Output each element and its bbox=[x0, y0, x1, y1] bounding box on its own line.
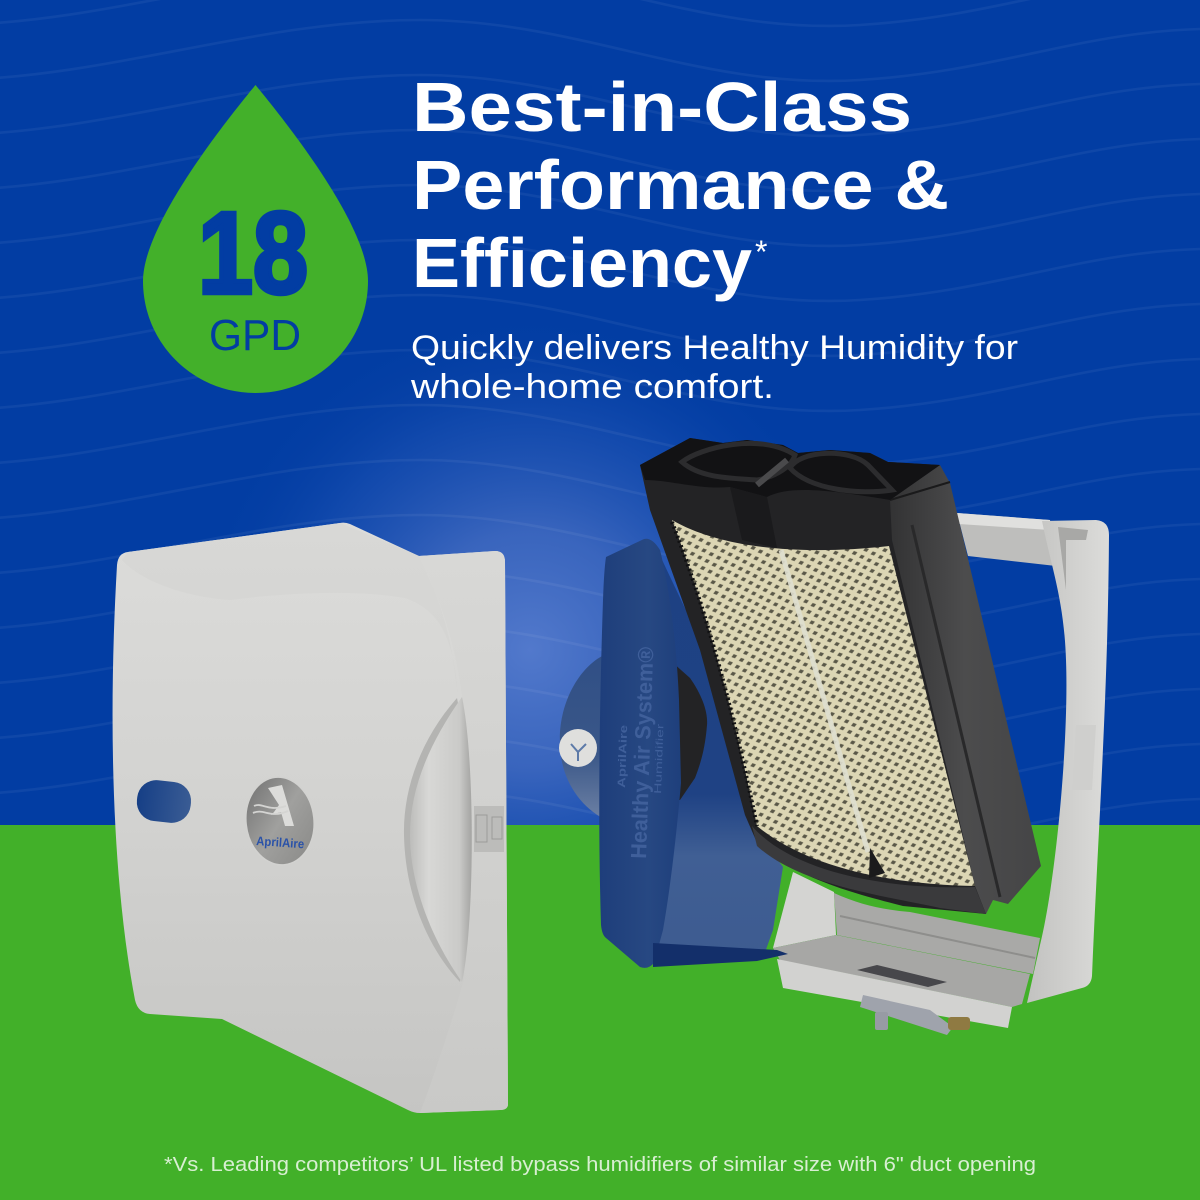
bottom clip bbox=[869, 848, 885, 878]
AprilAire logo badge bbox=[242, 774, 318, 868]
tray front bbox=[777, 959, 1012, 1028]
title: * bbox=[755, 234, 767, 270]
icon: water drop bbox=[143, 85, 368, 393]
blue door panel bbox=[599, 539, 681, 968]
mesh centre seam bbox=[781, 550, 868, 852]
cartridge side wall bbox=[888, 465, 1041, 914]
cover body bbox=[113, 523, 508, 1113]
blue inner duct bbox=[655, 545, 783, 960]
tray floor bbox=[773, 935, 1030, 1007]
unit GPD: GPD bbox=[209, 311, 301, 360]
blue humidity window bbox=[135, 778, 193, 825]
frame post bbox=[1027, 520, 1109, 1003]
cover back disc bbox=[494, 745, 503, 925]
latch recess bbox=[404, 698, 468, 982]
door lettering: AprilAire bbox=[616, 725, 630, 788]
green floor band bbox=[0, 825, 1200, 1200]
title: Efficiency bbox=[412, 224, 752, 302]
cover upper bevel bbox=[122, 523, 458, 700]
tray slot bbox=[857, 965, 947, 987]
mesh edge teeth bbox=[672, 522, 757, 826]
background glow bbox=[100, 300, 960, 826]
frame top arm bbox=[957, 513, 1056, 566]
post clip bbox=[1072, 725, 1096, 790]
cover right wing bbox=[419, 551, 508, 1113]
tray back wall bbox=[834, 893, 1040, 974]
bottom flap bbox=[653, 943, 788, 967]
cartridge bottom lip bbox=[752, 826, 986, 914]
evaporator mesh pad bbox=[672, 520, 975, 886]
logo wordmark: AprilAire bbox=[256, 834, 305, 851]
badge: 18 GPD water drop bbox=[143, 85, 368, 393]
cartridge top opening bbox=[640, 438, 940, 548]
fan loops bbox=[682, 443, 892, 492]
blue background bbox=[0, 0, 1200, 826]
subtitle: Quickly delivers Healthy Humidity for bbox=[411, 329, 1018, 367]
number 18: 18 bbox=[198, 188, 308, 318]
blue housing dome bbox=[560, 655, 604, 819]
door lettering: Healthy Air System® bbox=[626, 646, 658, 859]
title bbox=[412, 68, 949, 302]
side wall groove bbox=[912, 525, 1000, 897]
black hub bbox=[665, 662, 707, 800]
cartridge front frame bbox=[640, 438, 986, 914]
footnote: *Vs. Leading competitors’ UL listed bypass humidifiers of similar size with 6" duct opening bbox=[164, 1153, 1036, 1176]
side tab bbox=[474, 806, 504, 852]
subtitle: whole-home comfort. bbox=[410, 368, 774, 406]
drain fitting bbox=[860, 995, 953, 1035]
humidifier front cover bbox=[113, 523, 508, 1113]
white mounting frame bbox=[773, 513, 1109, 1035]
tray left wall bbox=[773, 872, 836, 948]
door lettering: Humidifier bbox=[653, 723, 666, 794]
centre channel bbox=[730, 487, 777, 548]
title: Best-in-Class bbox=[412, 68, 912, 146]
logo waves bbox=[253, 805, 288, 814]
dial bbox=[559, 729, 597, 767]
door lettering bbox=[616, 646, 666, 859]
brass valve bbox=[948, 1017, 970, 1030]
subtitle bbox=[410, 329, 1018, 406]
humidifier open unit bbox=[559, 438, 1109, 1035]
title: Performance & bbox=[412, 146, 949, 224]
fan rod bbox=[757, 460, 787, 485]
latch crescent bbox=[410, 697, 472, 982]
logo A mark bbox=[268, 785, 294, 826]
